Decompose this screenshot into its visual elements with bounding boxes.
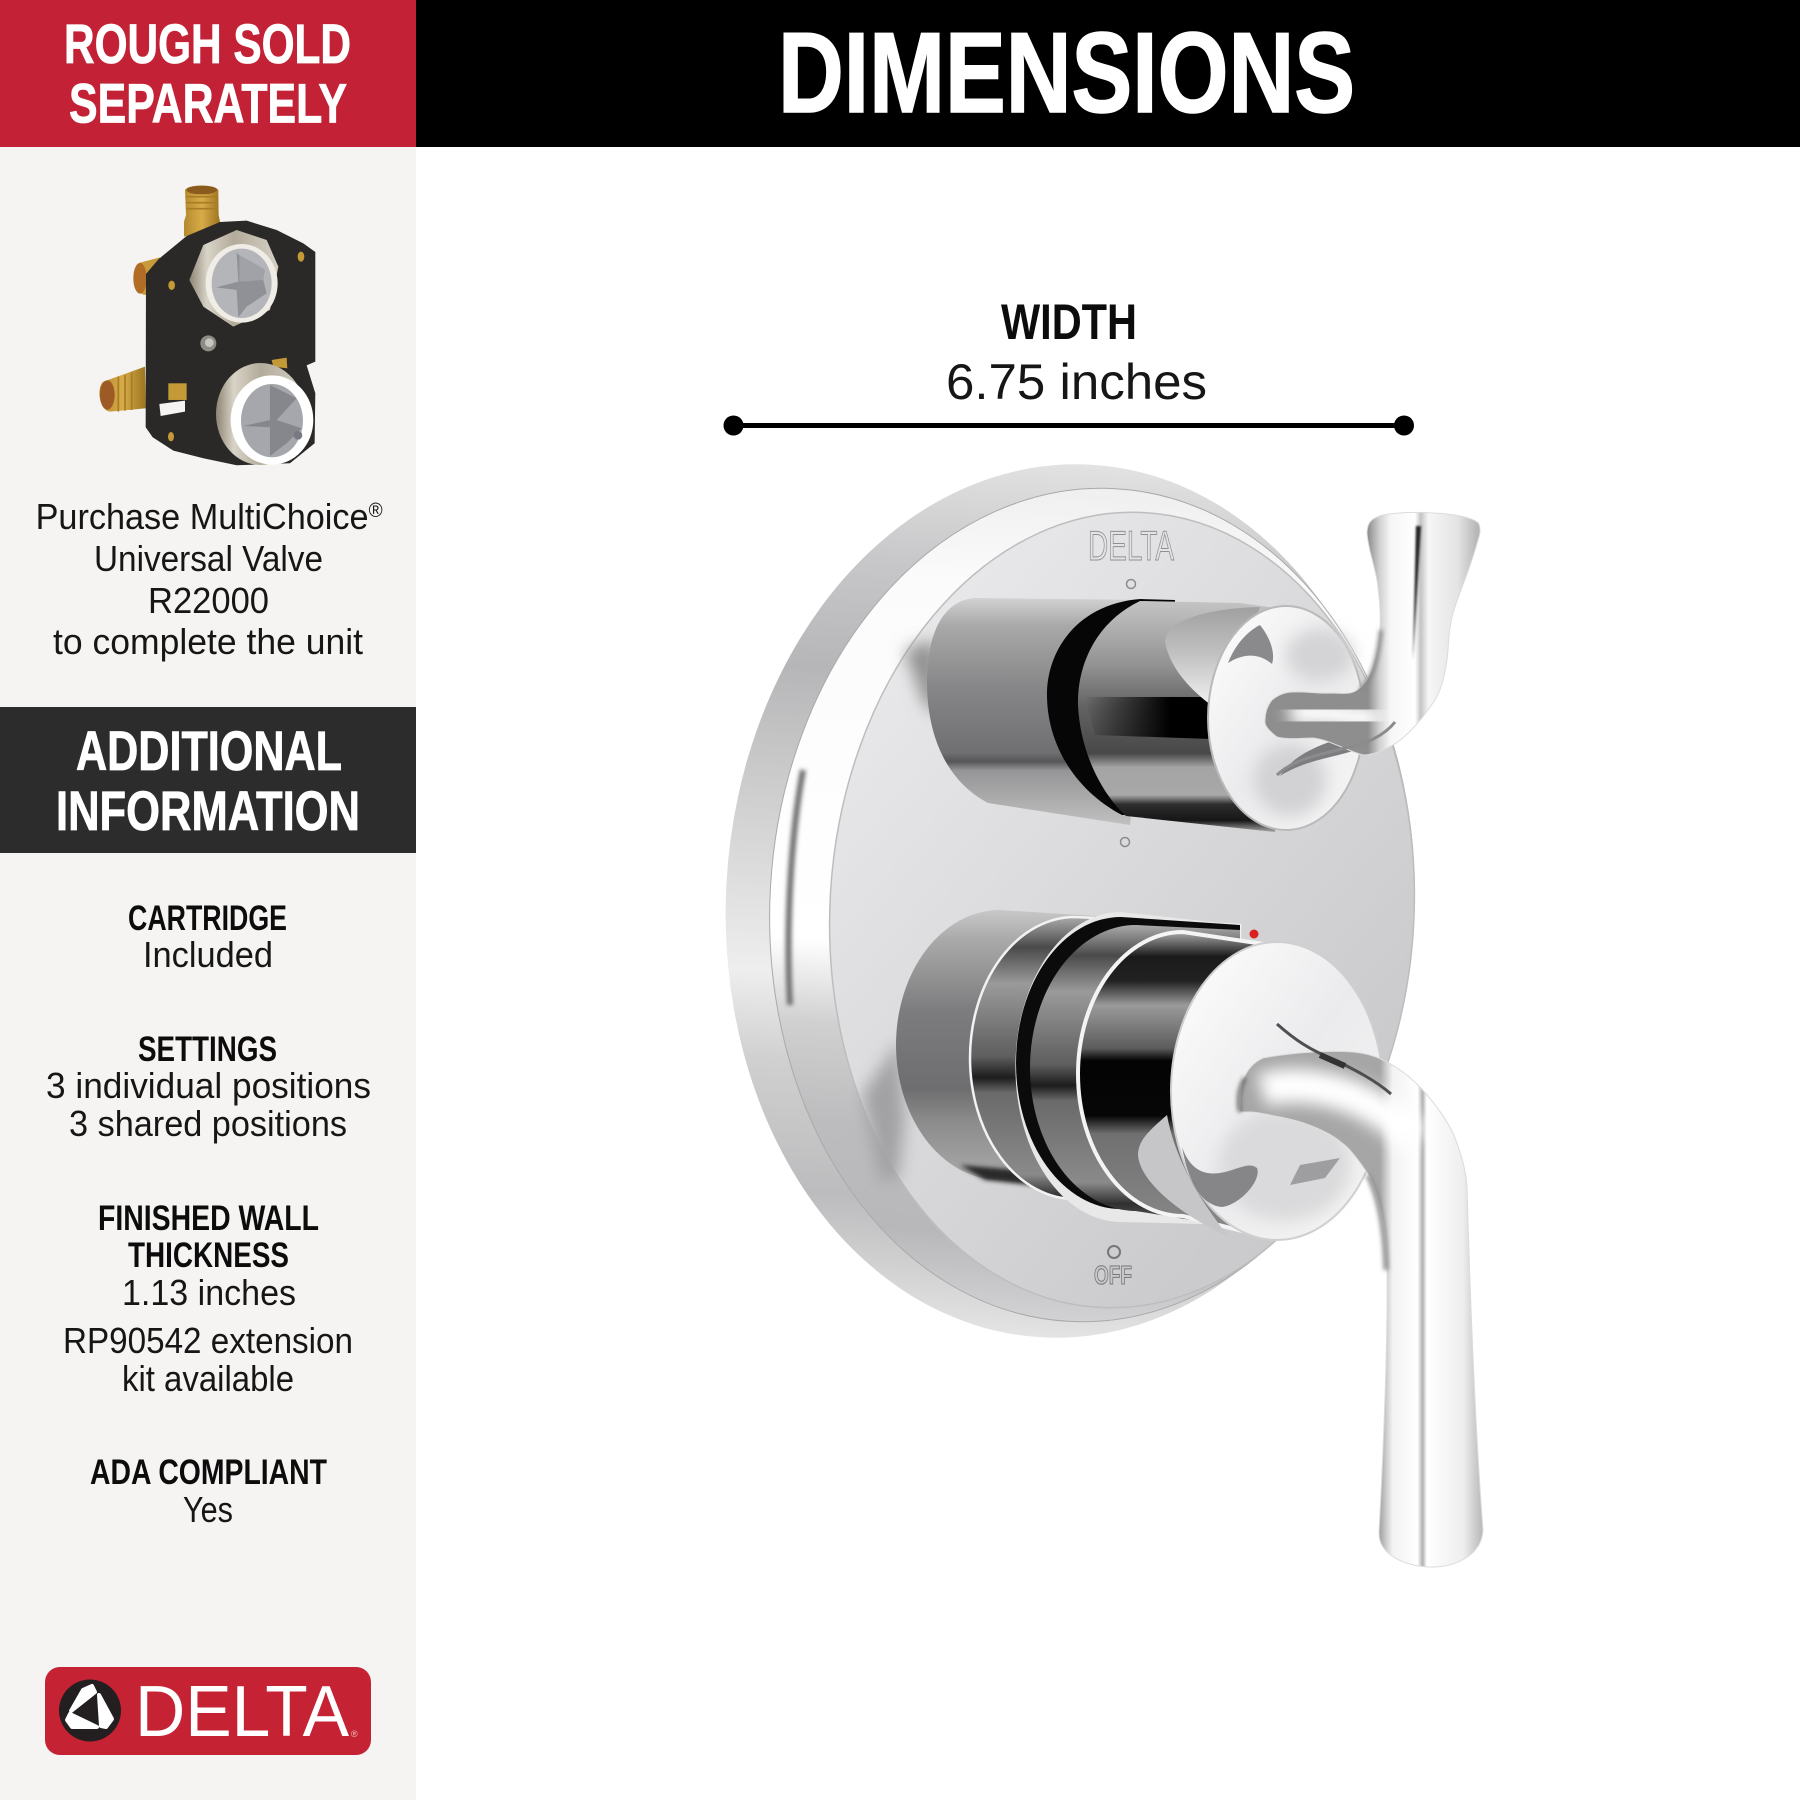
info: cartridge: CARTRIDGE: [128, 899, 287, 938]
info: cartridge: [128, 899, 287, 975]
info: finished wall thickness: RP90542 extension: [63, 1320, 353, 1361]
plate: outer bevel: [701, 445, 1431, 1357]
sidebar panel: [0, 147, 416, 1800]
text: purchase valve note: to complete the unit: [53, 621, 363, 662]
info: settings: SETTINGS: [138, 1030, 277, 1069]
info: finished wall thickness: 1.13 inches: [122, 1272, 296, 1313]
plate: face: [808, 496, 1436, 1324]
upper knob: [927, 512, 1480, 832]
indicator dots: [1042, 580, 1136, 846]
heading: additional information: INFORMATION: [56, 779, 360, 842]
logo: delta: DELTA: [135, 1672, 349, 1752]
heading: additional information: ADDITIONAL: [76, 719, 342, 782]
plate: ring highlight: [789, 770, 803, 1005]
heading: additional information: [0, 707, 416, 853]
logo: delta: [45, 1667, 371, 1755]
lower knob: [896, 910, 1483, 1567]
info: settings: [46, 1030, 371, 1144]
info: ada compliant: ADA COMPLIANT: [90, 1453, 327, 1492]
dimension line: width: [724, 416, 1414, 436]
banner: rough sold separately: ROUGH SOLD: [64, 12, 351, 75]
red indicator: [1250, 930, 1258, 938]
info: settings: 3 shared positions: [69, 1103, 347, 1144]
banner: dimensions title: [416, 0, 1800, 147]
engraved off marker: [1094, 1246, 1132, 1290]
engraved brand: DELTA: [1088, 522, 1174, 569]
info: ada compliant: Yes: [183, 1489, 233, 1530]
info: finished wall thickness: FINISHED WALL: [98, 1199, 319, 1238]
plate: polished ring: [747, 470, 1437, 1340]
width label: [946, 294, 1207, 410]
plate: knob shadows: [862, 640, 940, 1180]
banner: dimensions title: DIMENSIONS: [778, 10, 1355, 137]
info: ada compliant: [90, 1453, 327, 1530]
text: purchase valve note: ®: [369, 500, 383, 522]
info: cartridge: Included: [143, 934, 273, 975]
info: finished wall thickness: kit available: [122, 1358, 294, 1399]
product: shower valve trim: [701, 445, 1483, 1567]
info: finished wall thickness: THICKNESS: [128, 1236, 289, 1275]
width label: WIDTH: [1001, 294, 1137, 350]
logo: delta: ®: [351, 1729, 358, 1739]
engraved off marker: OFF: [1094, 1260, 1132, 1290]
text: purchase valve note: [36, 496, 383, 662]
info: settings: 3 individual positions: [46, 1065, 371, 1106]
info: finished wall thickness: [63, 1199, 353, 1399]
width label: 6.75 inches: [946, 354, 1207, 410]
text: purchase valve note: Universal Valve: [94, 538, 323, 579]
text: purchase valve note: Purchase MultiChoice: [36, 496, 386, 537]
banner: rough sold separately: SEPARATELY: [69, 72, 347, 134]
banner: rough sold separately: [0, 0, 416, 147]
icon: rough-in valve: [99, 185, 315, 465]
text: purchase valve note: R22000: [148, 580, 269, 621]
